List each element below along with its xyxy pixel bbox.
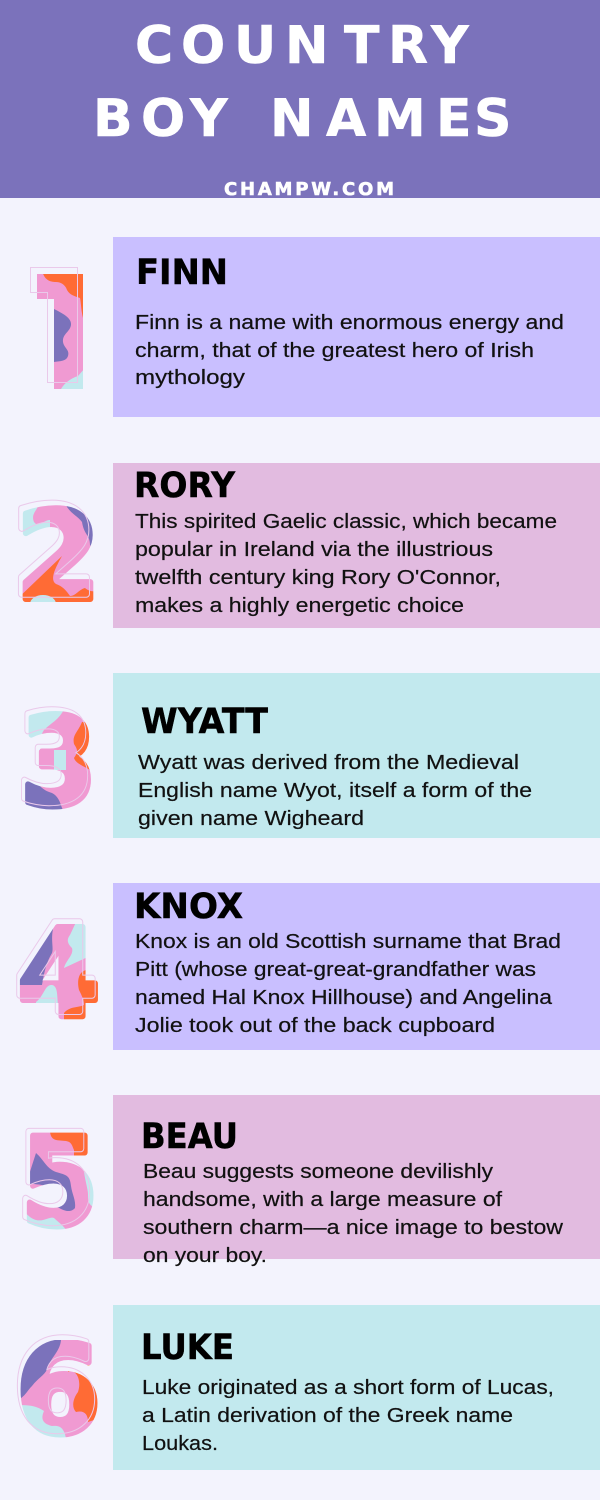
description: Rory: twelfth century king Rory O'Connor, <box>135 567 501 589</box>
description: Beau <box>143 1161 564 1267</box>
number 5 colored fill <box>26 1132 94 1230</box>
description: Beau: on your boy. <box>143 1245 267 1267</box>
number 6 colored fill <box>20 1340 98 1438</box>
website subtitle: CHAMPW.COM <box>224 179 394 200</box>
icon: number 5 <box>22 1128 94 1230</box>
description: Rory: This spirited Gaelic classic, which became <box>135 511 557 533</box>
description: Knox: named Hal Knox Hillhouse) and Angelina <box>135 987 553 1009</box>
description: Wyatt: given name Wigheard <box>138 808 364 830</box>
description: Finn: mythology <box>135 367 245 389</box>
number 2 colored fill <box>22 505 94 602</box>
number 6 outline <box>16 1334 96 1434</box>
description: Beau: Beau suggests someone devilishly <box>143 1161 493 1183</box>
description: Rory: makes a highly energetic choice <box>135 595 464 617</box>
description: Knox: Pitt (whose great-great-grandfather was <box>135 959 536 981</box>
heading: Beau: BEAU <box>141 1117 238 1157</box>
icon: number 3 <box>21 706 91 810</box>
heading: Wyatt: WYATT <box>141 702 268 742</box>
description: Rory: popular in Ireland via the illustrious <box>135 539 493 561</box>
heading: Rory: RORY <box>134 466 236 506</box>
panel: Luke <box>113 1305 600 1470</box>
panel: Beau <box>113 1095 600 1267</box>
heading: Knox: KNOX <box>134 887 243 927</box>
description: Finn <box>135 312 564 389</box>
panel: Rory <box>113 463 600 628</box>
description: Luke: Luke originated as a short form of Lucas, <box>142 1377 554 1399</box>
number 3 outline <box>21 706 88 806</box>
description: Knox: Jolie took out of the back cupboard <box>135 1015 495 1037</box>
number 1 outline <box>30 268 78 382</box>
description: Wyatt: English name Wyot, itself a form of the <box>138 780 532 802</box>
heading: Luke: LUKE <box>141 1328 234 1368</box>
title <box>93 16 511 149</box>
description: Wyatt: Wyatt was derived from the Medieval <box>138 752 519 774</box>
panel: Finn <box>113 237 600 417</box>
description: Beau: southern charm—a nice image to bestow <box>143 1217 564 1239</box>
title: COUNTRY <box>135 16 470 76</box>
icon: number 2 <box>18 500 94 602</box>
description: Knox <box>135 931 561 1037</box>
description: Luke: a Latin derivation of the Greek name <box>142 1405 513 1427</box>
panel: Knox <box>113 883 600 1050</box>
number 4 outline <box>16 918 96 1015</box>
title: BOY NAMES <box>93 89 511 149</box>
number 5 outline <box>22 1128 90 1226</box>
number 2 outline <box>18 500 90 598</box>
description: Finn: charm, that of the greatest hero of Irish <box>135 340 534 362</box>
description: Finn: Finn is a name with enormous energy and <box>135 312 564 334</box>
description: Rory <box>135 511 557 617</box>
icon: number 1 <box>30 267 83 389</box>
description: Beau: handsome, with a large measure of <box>143 1189 502 1211</box>
description: Knox: Knox is an old Scottish surname that Brad <box>135 931 561 953</box>
description: Luke: Loukas. <box>142 1433 218 1455</box>
number 4 colored fill <box>20 924 98 1020</box>
icon: number 4 <box>16 918 98 1020</box>
description: Luke <box>142 1377 554 1455</box>
number 1 colored fill <box>37 274 83 389</box>
header banner <box>0 0 600 200</box>
icon: number 6 <box>16 1334 98 1438</box>
number 3 colored fill <box>25 711 91 810</box>
panel: Wyatt <box>113 673 600 838</box>
description: Wyatt <box>138 752 532 830</box>
heading: Finn: FINN <box>136 253 228 293</box>
